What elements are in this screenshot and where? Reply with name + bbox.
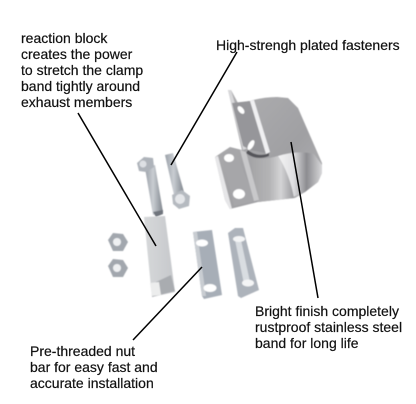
callout: reaction block: creates the power xyxy=(21,46,132,62)
leader line: reaction block xyxy=(78,113,156,246)
nut top xyxy=(108,233,128,251)
callout: reaction block: band tightly around xyxy=(21,78,140,94)
callout: reaction block: reaction block xyxy=(21,30,107,46)
clamp band xyxy=(215,90,322,209)
callout: stainless band: band for long life xyxy=(255,335,359,351)
callout: reaction block: exhaust members xyxy=(21,94,132,110)
bolt right xyxy=(165,153,190,209)
leader line: stainless band xyxy=(291,142,318,298)
nut bottom xyxy=(108,259,128,277)
callout: nut bar: accurate installation xyxy=(30,375,154,391)
callout: nut bar xyxy=(30,343,158,391)
callout: nut bar: bar for easy fast and xyxy=(30,359,158,375)
nut bar right xyxy=(228,228,259,298)
callout: stainless band: rustproof stainless steel xyxy=(255,319,402,335)
callout: stainless band: Bright finish completely xyxy=(255,303,399,319)
leader line: nut bar xyxy=(133,267,202,340)
bolt left xyxy=(137,157,163,217)
callout: fasteners: High-strengh plated fasteners xyxy=(216,37,400,53)
reaction block xyxy=(144,216,175,297)
callout: reaction block xyxy=(21,30,143,110)
callout: reaction block: to stretch the clamp xyxy=(21,62,143,78)
nut bar left xyxy=(193,230,222,299)
callout: stainless band xyxy=(255,303,402,352)
callout: nut bar: Pre-threaded nut xyxy=(30,343,135,359)
leader line: fasteners xyxy=(171,52,237,165)
